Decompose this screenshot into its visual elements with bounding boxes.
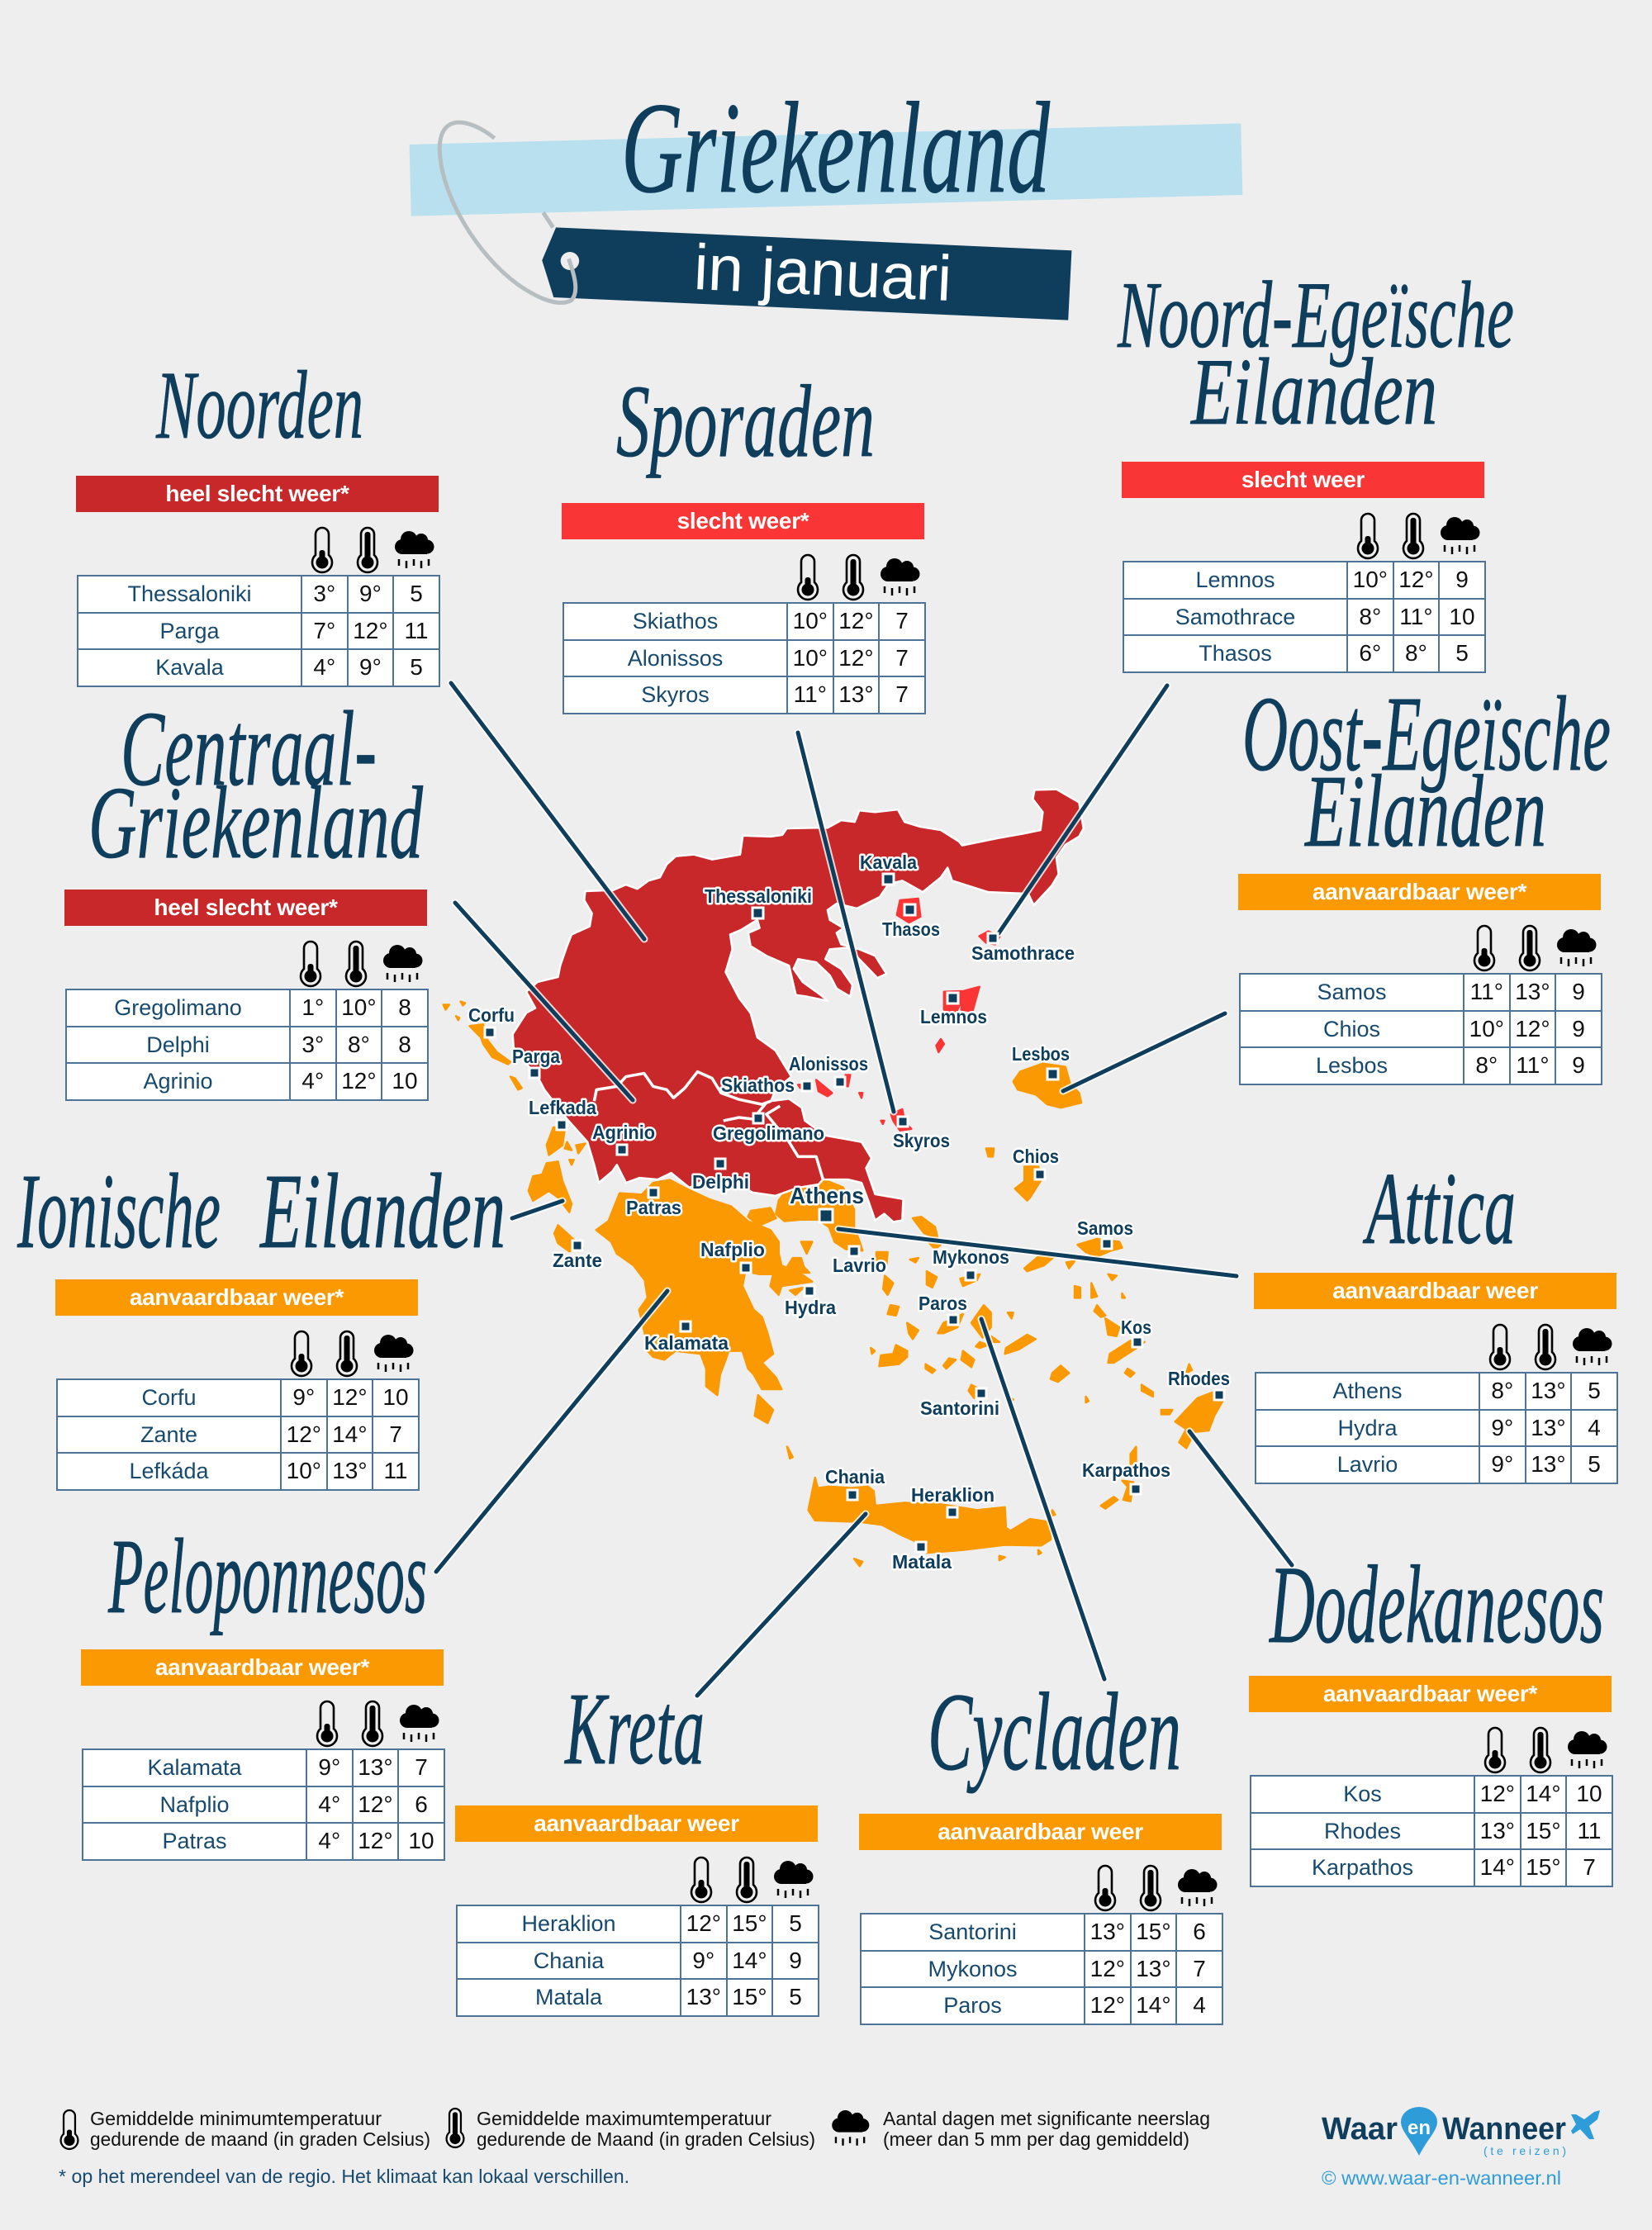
panel: Oost-Egeische Eilanden [1238,874,1602,1085]
climate table: Thessaloniki [127,581,252,606]
climate table: 10 [392,1068,418,1094]
city: Hydra: Hydra [785,1297,836,1318]
subtitle: in januari [692,230,953,315]
weather icons [311,527,434,573]
climate table: 11 [1577,1818,1602,1843]
northern Aegean and Sporades islands [798,899,999,1131]
climate table: Heraklion [521,1911,616,1936]
climate table: 10 [1449,604,1475,629]
logo pin [1401,2107,1437,2156]
climate table: 10° [793,608,828,633]
heading: Kreta: Kreta [564,1672,705,1786]
rating bar: aanvaardbaar weer [1332,1278,1538,1303]
climate table: 14° [332,1421,368,1447]
heading: Attica: Attica [1363,1152,1516,1266]
logo words: Waar [1322,2112,1398,2147]
northern mainland and central Greece [513,790,1084,1222]
rating bar: heel slecht weer* [165,481,349,506]
climate table: 5 [410,581,423,606]
main title: Griekenland [621,76,1051,221]
climate table: Agrinio [143,1069,213,1094]
climate table: 7 [1583,1854,1596,1880]
rating bar [55,1279,418,1316]
heading: Griekenland central: Griekenland [88,766,423,880]
climate table: 3° [301,1032,324,1057]
climate table: 9 [1455,567,1469,592]
light blue ribbon [410,123,1242,216]
rating bar [1122,462,1484,498]
climate table: 15° [1526,1854,1561,1880]
logo plane [1571,2110,1600,2139]
climate table: 14° [1136,1992,1171,2018]
rating bar: heel slecht weer* [154,894,338,920]
climate table: 7 [389,1421,402,1447]
city: Kos [1121,1317,1151,1347]
legend: rain days [832,2108,1210,2150]
climate table: 9° [1491,1451,1513,1477]
climate table [1123,561,1486,672]
climate table: Skiathos [633,609,718,633]
climate table: 13° [1515,979,1550,1004]
city: Thasos: Thasos [882,918,940,940]
climate table: 13° [1531,1451,1566,1477]
climate table: Parga [159,619,220,643]
city: Agrinio [592,1122,655,1155]
climate table: 8° [1359,604,1381,629]
city: Lesbos: Lesbos [1012,1043,1070,1065]
city: Alonissos [789,1053,868,1087]
climate table: 5 [1455,640,1469,666]
city: Samos: Samos [1077,1217,1133,1239]
climate table: 12° [1398,567,1434,592]
city: Hydra [785,1286,836,1318]
weather icons [316,1700,439,1748]
city labels [468,852,1230,1573]
weather icons [299,940,423,988]
city: Athens: Athens [790,1183,864,1208]
heading: Peloponnesos: Peloponnesos [107,1517,427,1636]
climate table: 11° [1516,1052,1550,1078]
rating bar [1254,1273,1616,1309]
climate table [82,1748,445,1860]
climate table: 5 [1588,1378,1601,1403]
climate table: Rhodes [1324,1819,1401,1843]
weather icons [1483,1726,1607,1774]
climate table [1250,1775,1613,1886]
panel: Noord-Egeische Eilanden [1122,462,1486,673]
climate table: Samos [1317,980,1387,1004]
city: Lefkada: Lefkada [529,1097,596,1118]
city: Kavala [860,852,917,885]
city: Patras: Patras [626,1197,681,1218]
city: Rhodes [1168,1368,1230,1400]
climate table: 10° [341,994,377,1020]
city: Chania: Chania [825,1466,885,1487]
rating bar [81,1649,444,1686]
climate table: 9° [359,581,382,606]
rating bar: aanvaardbaar weer* [1313,879,1526,904]
rating bar: aanvaardbaar weer* [130,1284,344,1310]
climate table: 12° [838,608,874,633]
climate table: 5 [1588,1451,1601,1477]
city: Zante [553,1241,602,1271]
city: Gregolimano [713,1113,824,1144]
logo en: en [1408,2117,1431,2139]
climate table: Samothrace [1175,605,1295,629]
climate table: 11° [1399,604,1433,629]
weather icons [1474,925,1596,971]
city: Lemnos [920,993,987,1027]
western islands [444,1002,1081,1251]
weather icons [1488,1323,1612,1371]
rating bar [64,890,427,926]
panel: Centraal-Griekenland [64,890,429,1101]
city: Athens [790,1183,864,1222]
climate table: Kalamata [147,1755,242,1780]
tag string [439,122,576,303]
city: Matala [892,1542,952,1573]
legend: maximum temperature: Gemiddelde maximumtemperatuur [477,2108,771,2129]
climate table: 9 [1572,979,1585,1004]
city: Karpathos [1082,1459,1170,1494]
legend: minimum temperature [61,2108,430,2150]
city: Skyros: Skyros [893,1130,950,1151]
climate table: 6° [1359,640,1381,666]
climate table: 12° [1515,1016,1550,1041]
city: Thessaloniki [705,885,812,918]
city: Thasos [882,904,940,940]
weather icons [291,1330,413,1378]
city: Skiathos: Skiathos [721,1075,795,1096]
climate table: Corfu [141,1385,197,1410]
city: Karpathos: Karpathos [1082,1459,1170,1481]
footnote: * op het merendeel van de regio. Het klimaat kan lokaal verschillen. [59,2166,629,2187]
city: Corfu: Corfu [468,1004,515,1026]
climate table: 13° [838,681,874,707]
climate table: 4° [313,654,335,680]
city: Zante: Zante [553,1250,602,1271]
city: Corfu [468,1004,515,1037]
city: Gregolimano: Gregolimano [713,1122,824,1144]
panel: Attica [1254,1273,1618,1484]
climate table: 3° [313,581,335,606]
rating bar [455,1805,818,1842]
climate table: 10° [287,1458,321,1483]
climate table: 15° [732,1910,767,1936]
climate table: 9° [359,654,382,680]
rating bar [562,503,924,539]
city: Parga: Parga [512,1046,560,1067]
city: Matala: Matala [892,1551,952,1573]
city: Samothrace: Samothrace [971,942,1075,964]
city: Alonissos: Alonissos [789,1053,868,1075]
climate table: 7 [415,1754,428,1780]
logo [1322,2107,1600,2189]
climate table: 12° [1090,1992,1125,2018]
climate table: 12° [838,645,874,671]
climate table: 10 [408,1828,434,1853]
climate table: 8° [348,1032,370,1057]
climate table: 9° [292,1384,315,1410]
climate table: Skyros [641,682,710,707]
climate table: Kavala [155,655,224,680]
climate table: 7° [313,618,335,643]
climate table: 5 [789,1984,802,2009]
city: Patras [626,1188,681,1218]
city: Delphi [692,1159,749,1193]
city: Kos: Kos [1121,1317,1151,1338]
climate table: 9 [789,1948,802,1973]
climate table: Karpathos [1312,1855,1413,1880]
legend: minimum temperature: gedurende de maand (in graden Celsius) [90,2128,430,2150]
website: © www.waar-en-wanneer.nl [1322,2167,1561,2189]
panel: Cycladen [859,1814,1223,2025]
climate table: Lefkáda [129,1459,209,1483]
climate table: 4 [1193,1992,1206,2018]
climate table: 13° [358,1754,393,1780]
rating bar: aanvaardbaar weer [534,1810,739,1836]
climate table: Lesbos [1316,1053,1388,1078]
legend: rain days: (meer dan 5 mm per dag gemiddeld) [883,2128,1189,2150]
connector lines [436,683,1292,1696]
climate table: 8 [398,994,411,1020]
climate table: 15° [1136,1919,1171,1944]
climate table: 13° [1531,1415,1566,1440]
climate table: Alonissos [628,646,723,671]
climate table: 12° [353,618,388,643]
climate table: Santorini [928,1919,1017,1944]
climate table: Athens [1332,1378,1403,1403]
logo tagline: (te reizen) [1483,2144,1566,2157]
rating bar [76,476,439,512]
climate table: Kos [1343,1782,1382,1806]
climate table: Lemnos [1195,567,1275,592]
map of Greece [444,790,1222,1566]
climate table: 10° [1353,567,1388,592]
climate table [56,1378,420,1490]
heading: Eilanden Ionian: Eilanden [259,1152,506,1271]
climate table: 11 [404,618,429,643]
weather icons [796,553,920,601]
city: Parga [512,1046,560,1078]
heading: Eilanden north: Eilanden [1190,339,1437,444]
climate table: 13° [686,1984,721,2009]
city: Agrinio: Agrinio [592,1122,655,1143]
city: Kavala: Kavala [860,852,917,873]
climate table: 7 [895,645,909,671]
climate table: 12° [287,1421,321,1447]
rating bar [1238,874,1601,910]
climate table: 9° [1491,1415,1513,1440]
climate table: Nafplio [159,1792,230,1817]
legend: minimum temperature: Gemiddelde minimumtemperatuur [90,2108,382,2129]
climate table: 12° [358,1828,393,1853]
panel: Dodekanesos [1249,1676,1613,1887]
city: Nafplio [700,1239,765,1273]
climate table: 8° [1491,1378,1513,1403]
city: Chios [1013,1146,1059,1179]
climate table: 9 [1572,1052,1585,1078]
legend: maximum temperature: gedurende de Maand (in graden Celsius) [477,2128,815,2150]
rating bar: aanvaardbaar weer* [1323,1681,1537,1706]
climate table: 14° [1480,1854,1515,1880]
legend: rain days: Aantal dagen met significante neerslag [883,2108,1210,2129]
climate table: 4° [318,1828,340,1853]
weather icons [1094,1865,1218,1911]
climate table: 6 [415,1791,428,1817]
navy tag [542,227,1071,320]
title banner [410,122,1242,320]
city: Nafplio: Nafplio [700,1239,765,1260]
heading: Ionische: Ionische [17,1152,221,1271]
climate table: 10° [793,645,828,671]
climate table: 12° [341,1068,377,1094]
climate table: 14° [1526,1781,1561,1806]
climate table [1239,973,1602,1085]
city: Heraklion: Heraklion [911,1484,995,1506]
climate table: 1° [301,994,324,1020]
climate table: 6 [1193,1919,1206,1944]
city: Kalamata: Kalamata [644,1332,729,1354]
climate table: 7 [895,681,909,707]
climate table: 9 [1572,1016,1585,1041]
climate table [563,602,926,714]
city: Mykonos: Mykonos [933,1246,1009,1268]
climate table: Thasos [1199,641,1272,666]
climate table [860,1913,1223,2025]
city: Paros [919,1293,967,1325]
city: Lefkada [529,1097,596,1130]
climate table: 13° [1531,1378,1566,1403]
city: Samos [1077,1217,1133,1249]
climate table: Gregolimano [114,995,242,1020]
climate table [456,1905,819,2017]
climate table: 8 [398,1032,411,1057]
climate table: Chania [534,1948,604,1973]
city: Heraklion [911,1484,995,1517]
climate table: 12° [1480,1781,1515,1806]
city: Delphi: Delphi [692,1171,749,1193]
climate table: Lavrio [1337,1452,1398,1477]
climate table [65,989,429,1100]
climate table: Hydra [1337,1416,1398,1440]
climate table: 7 [895,608,909,633]
city: Lavrio [833,1246,886,1276]
climate table: 13° [332,1458,368,1483]
panel: Peloponnesos [81,1649,445,1861]
legend [61,2108,1210,2150]
climate table: 12° [1090,1956,1125,1981]
climate table: 8° [1475,1052,1498,1078]
rating bar: slecht weer* [677,508,809,534]
climate table: 15° [1526,1818,1561,1843]
Peloponnese, Attica, Crete and Aegean islands [596,1166,1222,1566]
climate table: 9° [318,1754,340,1780]
panel: Noorden [76,476,440,687]
climate table: 4° [301,1068,324,1094]
climate table: 13° [1136,1956,1171,1981]
climate table: 11° [794,681,827,707]
climate table: 11 [383,1458,408,1483]
city: Chania [825,1466,885,1500]
city: Chios: Chios [1013,1146,1059,1167]
climate table: 12° [332,1384,368,1410]
climate table: 5 [789,1910,802,1936]
climate table: 4° [318,1791,340,1817]
climate table [77,575,440,687]
climate table: 12° [358,1791,393,1817]
heading: Cycladen: Cycladen [928,1671,1181,1794]
legend: maximum temperature [447,2108,815,2150]
rating bar: aanvaardbaar weer* [155,1654,369,1680]
climate table: 11° [1470,979,1503,1004]
city: Paros: Paros [919,1293,967,1314]
climate table: Paros [943,1993,1002,2018]
rating bar: slecht weer [1241,467,1365,492]
climate table: Patras [162,1829,227,1853]
climate table: 13° [1090,1919,1125,1944]
panel: Kreta [455,1805,819,2017]
heading: Centraal: Centraal- [121,690,377,809]
climate table: Delphi [146,1032,210,1057]
city: Skyros [893,1117,950,1151]
climate table: Zante [140,1422,197,1447]
climate table: 7 [1193,1956,1206,1981]
rating bar [859,1814,1222,1850]
climate table: 8° [1405,640,1427,666]
city: Samothrace [971,933,1075,964]
climate table: Chios [1323,1017,1380,1041]
climate table: 5 [410,654,423,680]
city: Santorini: Santorini [920,1397,999,1419]
city: Lavrio: Lavrio [833,1255,886,1276]
regional border and gulf lines [594,1072,823,1179]
city: Rhodes: Rhodes [1168,1368,1230,1389]
climate table: 10 [1576,1781,1602,1806]
climate table: 10° [1469,1016,1504,1041]
heading: Noorden: Noorden [155,351,363,459]
climate table: 14° [732,1948,767,1973]
rating bar: aanvaardbaar weer [938,1819,1143,1844]
city: Santorini [920,1388,999,1419]
climate table: 12° [686,1910,721,1936]
rating bar [1249,1676,1612,1712]
weather icons [691,1857,813,1903]
logo Wanneer: Wanneer [1442,2112,1566,2147]
city: Lemnos: Lemnos [920,1006,987,1027]
heading: Sporaden: Sporaden [616,365,875,479]
climate table: 10 [382,1384,409,1410]
climate table: Mykonos [928,1957,1018,1981]
climate table [1255,1372,1618,1483]
city: Mykonos [933,1246,1009,1280]
city: Kalamata [644,1321,729,1354]
climate table: 9° [692,1948,714,1973]
city: Lesbos [1012,1043,1070,1079]
city: Thessaloniki: Thessaloniki [705,885,812,907]
climate table: 13° [1480,1818,1515,1843]
panel: Ionische Eilanden [55,1279,420,1491]
weather icons [1356,512,1480,560]
climate table: Matala [535,1985,602,2009]
climate table: 15° [732,1984,767,2009]
panel: Sporaden [562,503,926,714]
tag hole [561,252,579,270]
climate table: 4 [1588,1415,1601,1440]
